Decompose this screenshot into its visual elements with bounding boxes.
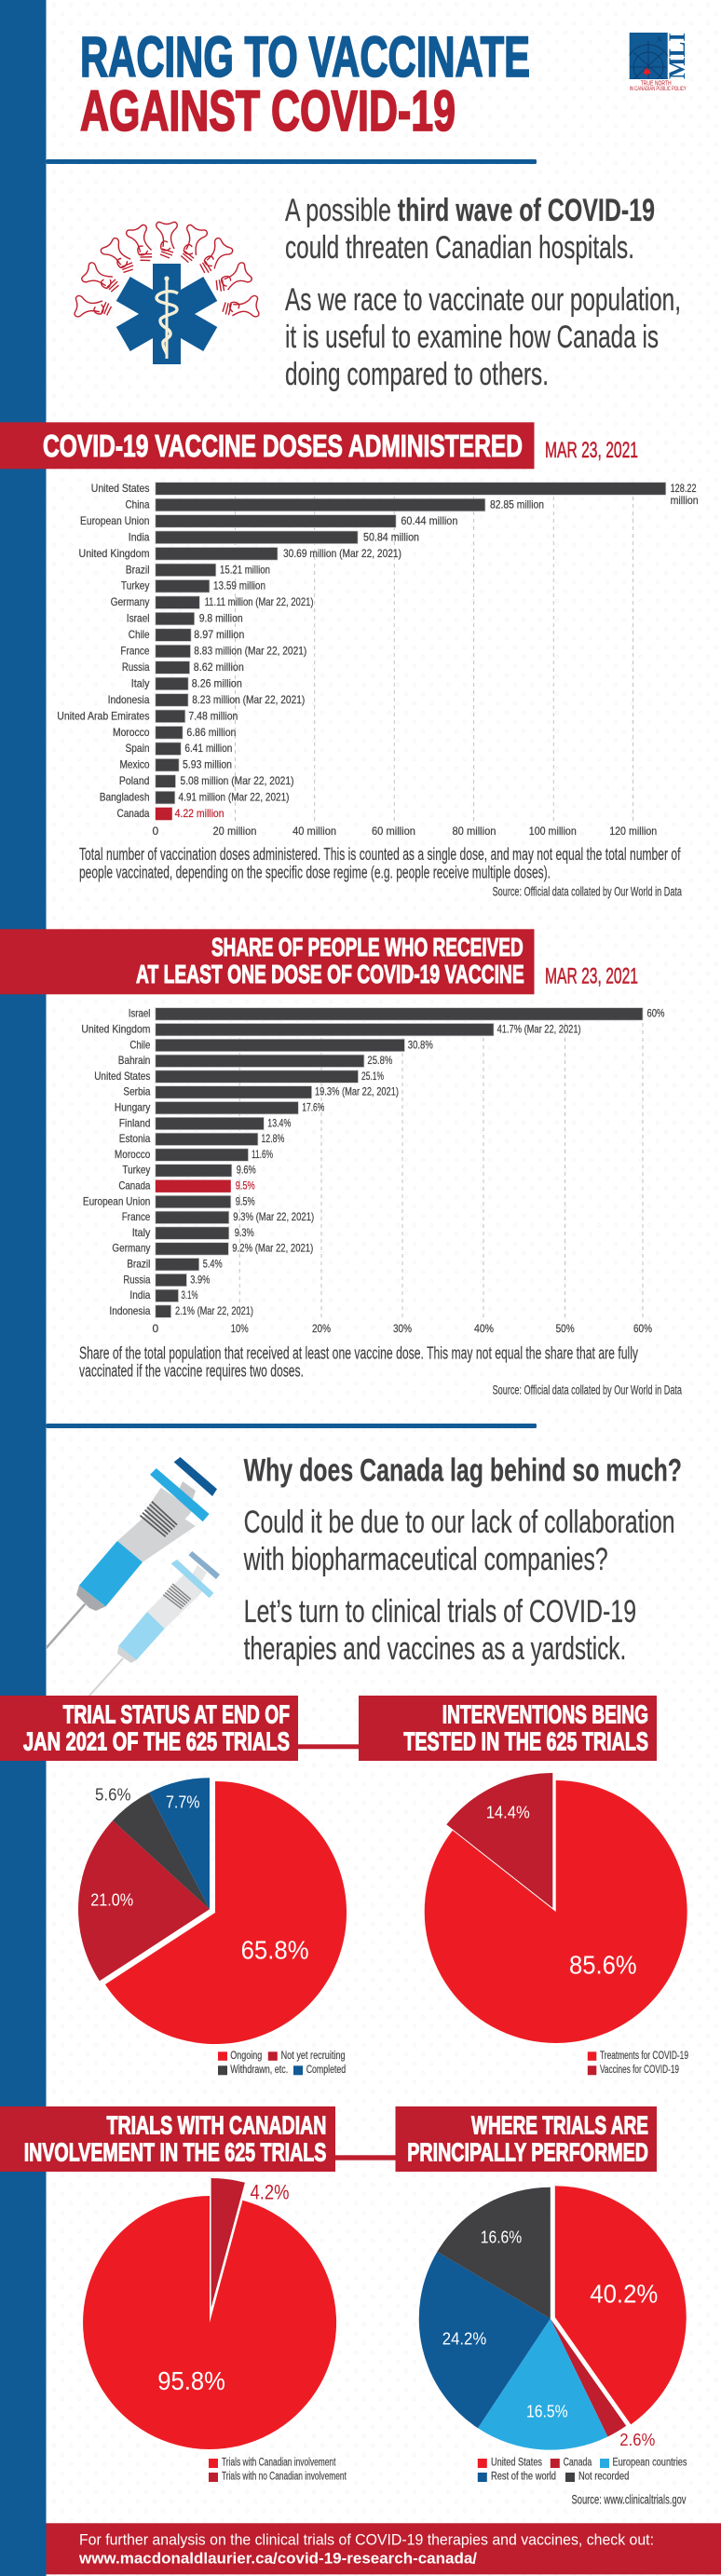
footer: www.macdonaldlaurier.ca/covid-19-research-canada/ <box>78 2550 477 2568</box>
legend: trial status <box>218 2051 346 2076</box>
country labels: United Kingdom <box>81 1023 150 1036</box>
country labels: India <box>129 530 150 543</box>
value labels: 19.3% (Mar 22, 2021) <box>315 1085 399 1098</box>
value labels: 9.3% (Mar 22, 2021) <box>233 1210 314 1223</box>
title <box>80 25 530 143</box>
country labels <box>57 482 150 820</box>
text block: why does Canada lag <box>243 1452 682 1667</box>
heading: share of people: SHARE OF PEOPLE WHO RECEIVED <box>211 933 524 961</box>
x axis labels: 80 million <box>453 825 496 838</box>
value labels: 82.85 million <box>490 497 544 511</box>
country labels: Poland <box>119 774 149 787</box>
country labels: France <box>120 645 150 658</box>
country labels: Canada <box>117 807 150 820</box>
pie chart: trial status: 5.6% <box>95 1786 130 1805</box>
country labels: Finland <box>119 1116 150 1129</box>
pie chart: interventions <box>425 1773 687 2043</box>
country labels: United States <box>94 1070 150 1083</box>
heading: trial status: JAN 2021 OF THE 625 TRIALS <box>23 1726 290 1755</box>
country labels: Italy <box>132 1226 150 1239</box>
country labels: Hungary <box>115 1101 150 1114</box>
country labels: Russia <box>123 1273 151 1286</box>
legend: Canadian involvement: Trials with Canadian involvement <box>222 2458 336 2469</box>
country labels: United Arab Emirates <box>57 709 149 722</box>
value labels: 60% <box>646 1007 665 1020</box>
value labels: 3.1% <box>181 1288 198 1302</box>
value labels: 30.69 million (Mar 22, 2021) <box>283 547 401 560</box>
legend: trial status: Withdrawn, etc. <box>230 2065 288 2076</box>
icon: star of life with virus spikes <box>75 222 259 364</box>
country labels: United Kingdom <box>78 547 149 560</box>
legend: Canadian involvement <box>209 2458 347 2483</box>
value labels: 30.8% <box>408 1038 433 1051</box>
value labels: 11.11 million (Mar 22, 2021) <box>205 595 314 608</box>
value labels: 12.8% <box>261 1132 285 1145</box>
value labels: 8.23 million (Mar 22, 2021) <box>192 693 305 706</box>
value labels: 9.6% <box>237 1164 256 1177</box>
x axis labels: 30% <box>393 1322 412 1335</box>
heading: Canadian involvement <box>0 2106 335 2172</box>
pie chart: trial status <box>78 1778 347 2044</box>
value labels: 5.08 million (Mar 22, 2021) <box>181 774 294 787</box>
country labels: Spain <box>125 742 149 755</box>
heading: where trials performed <box>395 2106 657 2172</box>
logo: MLI: IN CANADIAN PUBLIC POLICY <box>630 87 687 92</box>
text block: share note <box>79 1343 638 1380</box>
x axis labels <box>152 1322 652 1335</box>
heading: share of people: AT LEAST ONE DOSE OF COVID-19 VACCINE <box>136 960 524 988</box>
country labels: France <box>122 1210 151 1223</box>
value labels: 5.93 million <box>183 758 232 771</box>
heading: vaccine doses administered: COVID-19 VACCINE DOSES ADMINISTERED <box>43 429 523 463</box>
title: RACING TO VACCINATE <box>80 25 530 89</box>
country labels: Chile <box>129 628 150 641</box>
pie chart: where trials performed: 16.5% <box>526 2402 568 2420</box>
pie chart: where trials performed: 24.2% <box>442 2330 486 2349</box>
country labels: Canada <box>118 1179 151 1193</box>
pie chart: interventions: 14.4% <box>486 1804 530 1822</box>
pie chart: where trials performed: 40.2% <box>590 2280 658 2309</box>
country labels: Israel <box>129 1007 150 1020</box>
legend: where trials performed: Canada <box>564 2458 592 2469</box>
legend: where trials performed: Rest of the world <box>491 2472 556 2483</box>
date: MAR 23, 2021 <box>545 438 638 463</box>
x axis labels: 20 million <box>212 825 257 838</box>
value labels: 9.3% <box>235 1226 254 1239</box>
legend: interventions: Vaccines for COVID-19 <box>600 2065 679 2076</box>
legend: trial status: Ongoing <box>230 2051 262 2062</box>
icon: syringes <box>47 1457 220 1696</box>
country labels: India <box>129 1288 151 1302</box>
value labels: 60.44 million <box>401 514 457 527</box>
heading: interventions <box>359 1696 657 1761</box>
x axis labels: 100 million <box>529 825 577 838</box>
country labels: Italy <box>131 676 149 689</box>
value labels: 17.6% <box>302 1101 325 1114</box>
value labels: 3.9% <box>190 1273 211 1286</box>
value labels: 8.83 million (Mar 22, 2021) <box>194 645 306 658</box>
pie chart: interventions: 85.6% <box>569 1950 637 1979</box>
pie chart: trial status: 65.8% <box>241 1935 309 1964</box>
pie chart: trial status: 7.7% <box>166 1793 199 1812</box>
country labels: Israel <box>127 612 149 625</box>
country labels: Russia <box>122 661 150 674</box>
value labels: 6.86 million <box>186 726 236 739</box>
icon: large syringe <box>47 1457 217 1648</box>
country labels: Bahrain <box>118 1054 150 1067</box>
legend: where trials performed: European countries <box>613 2458 687 2469</box>
value labels: 9.8 million <box>199 612 243 625</box>
value labels: 8.62 million <box>194 661 244 674</box>
heading: Canadian involvement: INVOLVEMENT IN THE 625 TRIALS <box>24 2137 326 2166</box>
heading: Canadian involvement: TRIALS WITH CANADIAN <box>106 2111 326 2140</box>
country labels: Indonesia <box>109 1304 151 1317</box>
logo: MLI: TRUE NORTH <box>641 81 672 88</box>
country labels: Turkey <box>122 1164 150 1177</box>
country labels: Serbia <box>123 1085 151 1098</box>
value labels: million <box>671 494 699 507</box>
value labels: 7.48 million <box>188 709 238 722</box>
footer: For further analysis on the clinical trials of COVID-19 therapies and vaccines, check out: <box>79 2531 654 2549</box>
x axis labels: 120 million <box>609 825 657 838</box>
value labels <box>175 1007 665 1317</box>
x axis labels: 10% <box>231 1322 249 1335</box>
country labels: Germany <box>112 1242 150 1255</box>
country labels: Bangladesh <box>100 791 149 804</box>
value labels: 15.21 million <box>220 563 270 576</box>
country labels: Estonia <box>119 1132 151 1145</box>
value labels: 50.84 million <box>363 530 419 543</box>
x axis labels: 40% <box>474 1322 494 1335</box>
legend: trial status: Completed <box>306 2065 346 2076</box>
value labels <box>175 482 699 820</box>
value labels: 9.5% <box>236 1179 255 1193</box>
x axis labels <box>152 825 657 838</box>
value labels: 6.41 million <box>184 742 232 755</box>
bar chart: share of people vaccinated <box>81 1007 665 1335</box>
heading: share of people <box>0 929 535 994</box>
value labels: 8.97 million <box>194 628 244 641</box>
pie chart: Canadian involvement: 95.8% <box>157 2366 225 2395</box>
legend: where trials performed: Not recorded <box>578 2472 629 2483</box>
icon: small syringe <box>89 1551 220 1696</box>
country labels: Germany <box>111 595 149 608</box>
value labels: 41.7% (Mar 22, 2021) <box>497 1023 581 1036</box>
country labels: Mexico <box>119 758 150 771</box>
x axis labels: 0 <box>152 1322 158 1335</box>
date: MAR 23, 2021 <box>545 964 638 989</box>
legend: where trials performed <box>478 2458 687 2483</box>
pie chart: where trials performed: 16.6% <box>481 2228 522 2246</box>
legend: interventions <box>588 2051 688 2076</box>
country labels: United States <box>91 482 149 495</box>
bar chart: doses administered <box>57 482 699 838</box>
country labels: European Union <box>83 1194 150 1207</box>
logo: MLI: N <box>656 35 662 44</box>
value labels: 25.8% <box>367 1054 393 1067</box>
heading: trial status: TRIAL STATUS AT END OF <box>63 1699 290 1728</box>
pie chart: where trials performed <box>419 2186 687 2450</box>
country labels: Chile <box>129 1038 151 1051</box>
x axis labels: 20% <box>312 1322 331 1335</box>
value labels: 11.6% <box>252 1148 273 1161</box>
country labels: Brazil <box>127 1258 150 1271</box>
x axis labels: 60 million <box>372 825 415 838</box>
legend: where trials performed: United States <box>491 2458 542 2469</box>
x axis labels: 40 million <box>292 825 336 838</box>
country labels: European Union <box>80 514 149 527</box>
legend: trial status: Not yet recruiting <box>281 2051 346 2062</box>
value labels: 13.59 million <box>213 579 265 593</box>
logo: MLI <box>630 33 687 90</box>
logo: MLI: MLI <box>665 33 690 79</box>
title: AGAINST COVID-19 <box>80 79 456 143</box>
pie chart: Canadian involvement: 4.2% <box>250 2181 289 2204</box>
heading: vaccine doses administered <box>0 422 535 469</box>
text block: intro <box>285 193 681 392</box>
value labels: 25.1% <box>361 1070 384 1083</box>
text block: intro: doing compared to others. <box>285 357 549 392</box>
text block: doses note <box>79 845 681 882</box>
pie chart: where trials performed: 2.6% <box>619 2431 655 2449</box>
pie chart: Canadian involvement <box>83 2178 336 2449</box>
x axis labels: 50% <box>556 1322 575 1335</box>
country labels: Indonesia <box>108 693 150 706</box>
x axis labels: 0 <box>152 825 158 838</box>
value labels: 8.26 million <box>192 676 242 689</box>
country labels: Morocco <box>113 726 150 739</box>
pie chart: trial status: 21.0% <box>90 1891 133 1910</box>
text block: share note: vaccinated if the vaccine requires two doses. <box>79 1361 304 1380</box>
value labels: 4.22 million <box>175 807 224 820</box>
value labels: 128.22 <box>671 482 697 495</box>
value labels: 4.91 million (Mar 22, 2021) <box>179 791 290 804</box>
value labels: 2.1% (Mar 22, 2021) <box>175 1304 253 1317</box>
country labels: China <box>125 497 150 511</box>
x axis labels: 60% <box>633 1322 652 1335</box>
country labels <box>81 1007 151 1317</box>
value labels: 9.2% (Mar 22, 2021) <box>232 1242 313 1255</box>
legend: interventions: Treatments for COVID-19 <box>600 2051 688 2062</box>
legend: Canadian involvement: Trials with no Canadian involvement <box>222 2472 347 2483</box>
value labels: 13.4% <box>267 1116 292 1129</box>
country labels: Morocco <box>115 1148 151 1161</box>
country labels: Brazil <box>126 563 149 576</box>
footer <box>47 2523 721 2574</box>
country labels: Turkey <box>121 579 149 593</box>
heading: trial status <box>0 1696 298 1761</box>
value labels: 5.4% <box>203 1258 223 1271</box>
value labels: 9.5% <box>236 1194 255 1207</box>
